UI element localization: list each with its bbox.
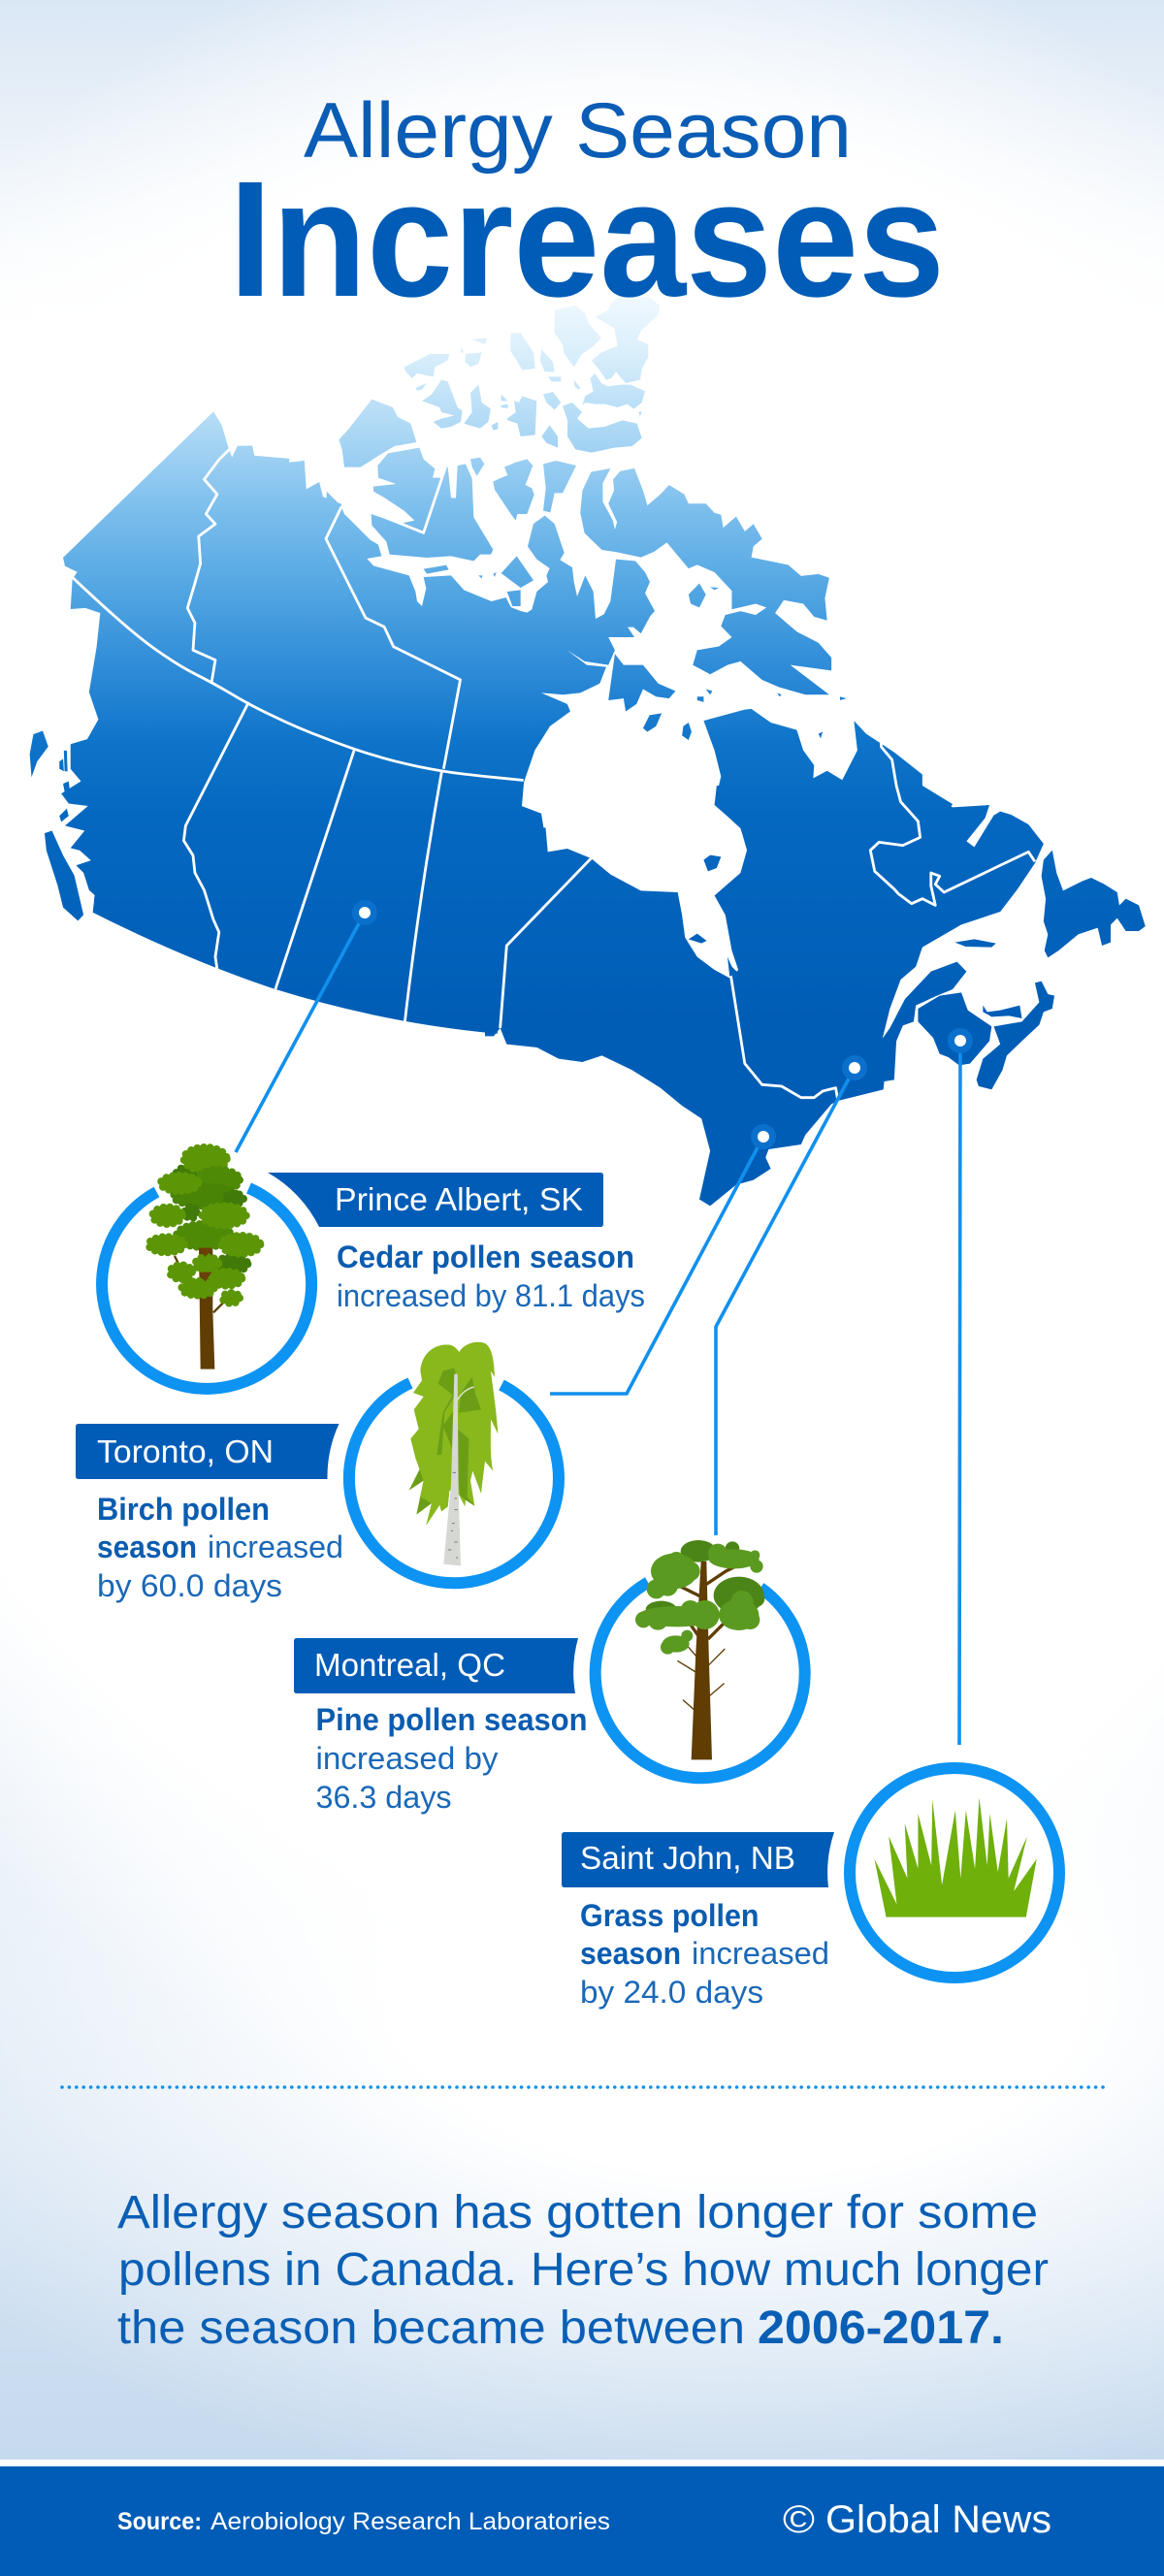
connector line: Saint John — [959, 1041, 960, 1745]
icon: pine tree — [635, 1540, 764, 1759]
text: pine stat: increased by — [316, 1741, 499, 1776]
label: Toronto, ON — [76, 1424, 340, 1479]
ring — [349, 1373, 559, 1583]
text: cedar stat: Cedar pollen season — [337, 1240, 634, 1274]
ring — [102, 1179, 311, 1389]
text: birch stat: increased — [208, 1530, 343, 1564]
text: pine stat: 36.3 days — [316, 1780, 452, 1815]
icon: birch tree — [409, 1342, 498, 1565]
connector line: Montreal — [716, 1068, 855, 1535]
title: Increases — [229, 147, 945, 332]
text: grass stat: Grass pollen — [580, 1898, 759, 1933]
connector line: Toronto — [550, 1137, 763, 1394]
text: birch stat: season — [97, 1530, 197, 1564]
text: grass stat: increased — [692, 1936, 829, 1971]
label: Montreal, QC — [294, 1638, 578, 1693]
text: summary: Allergy season has gotten longer for some — [117, 2187, 1038, 2238]
map of Canada — [19, 296, 1149, 1212]
pin: Saint John — [948, 1028, 973, 1053]
text: grass stat — [580, 1898, 829, 2010]
text: summary: 2006-2017. — [758, 2302, 1004, 2354]
logo: Global News: Global News — [825, 2498, 1051, 2541]
map land mass with gradient — [19, 296, 1149, 1212]
text: cedar stat: increased by 81.1 days — [337, 1278, 645, 1313]
ring — [596, 1568, 805, 1778]
label: Prince Albert, SK: Prince Albert, SK — [335, 1181, 583, 1217]
provincial borders — [73, 449, 1035, 1101]
icon: cedar tree — [148, 1147, 260, 1369]
label: Montreal, QC: Montreal, QC — [314, 1647, 505, 1683]
label: Toronto, ON: Toronto, ON — [97, 1433, 274, 1469]
panel: Toronto birch — [76, 1342, 559, 1603]
icon: grass — [874, 1797, 1037, 1917]
text: birch stat: Birch pollen — [97, 1492, 270, 1527]
title: Allergy Season — [304, 87, 852, 175]
panel: Prince Albert cedar — [102, 1147, 645, 1389]
pin: Toronto — [751, 1124, 776, 1149]
text: summary: pollens in Canada. Here’s how much longer — [118, 2244, 1049, 2296]
text: birch stat: by 60.0 days — [97, 1568, 282, 1603]
text: cedar stat — [337, 1240, 645, 1313]
label: Prince Albert, SK — [268, 1173, 603, 1227]
text: grass stat: by 24.0 days — [580, 1975, 763, 2010]
text: grass stat: season — [580, 1936, 681, 1971]
label: Saint John, NB: Saint John, NB — [580, 1840, 795, 1876]
text: birch stat — [97, 1492, 343, 1603]
panel: Montreal pine — [294, 1540, 805, 1815]
footer — [0, 2466, 1164, 2576]
pin: Prince Albert — [352, 900, 377, 925]
text: pine stat — [316, 1702, 588, 1815]
source credit: Source: — [117, 2508, 202, 2535]
ring — [850, 1768, 1059, 1978]
logo: Global News: © — [783, 2498, 815, 2541]
connector line: Prince Albert — [236, 913, 365, 1152]
text: summary: the season became between — [117, 2302, 745, 2354]
text: pine stat: Pine pollen season — [316, 1702, 588, 1737]
pin: Montreal — [842, 1055, 867, 1080]
source credit: Aerobiology Research Laboratories — [210, 2508, 610, 2535]
label: Saint John, NB — [562, 1832, 834, 1887]
panel: Saint John grass — [562, 1768, 1059, 2010]
text: summary — [117, 2187, 1049, 2354]
